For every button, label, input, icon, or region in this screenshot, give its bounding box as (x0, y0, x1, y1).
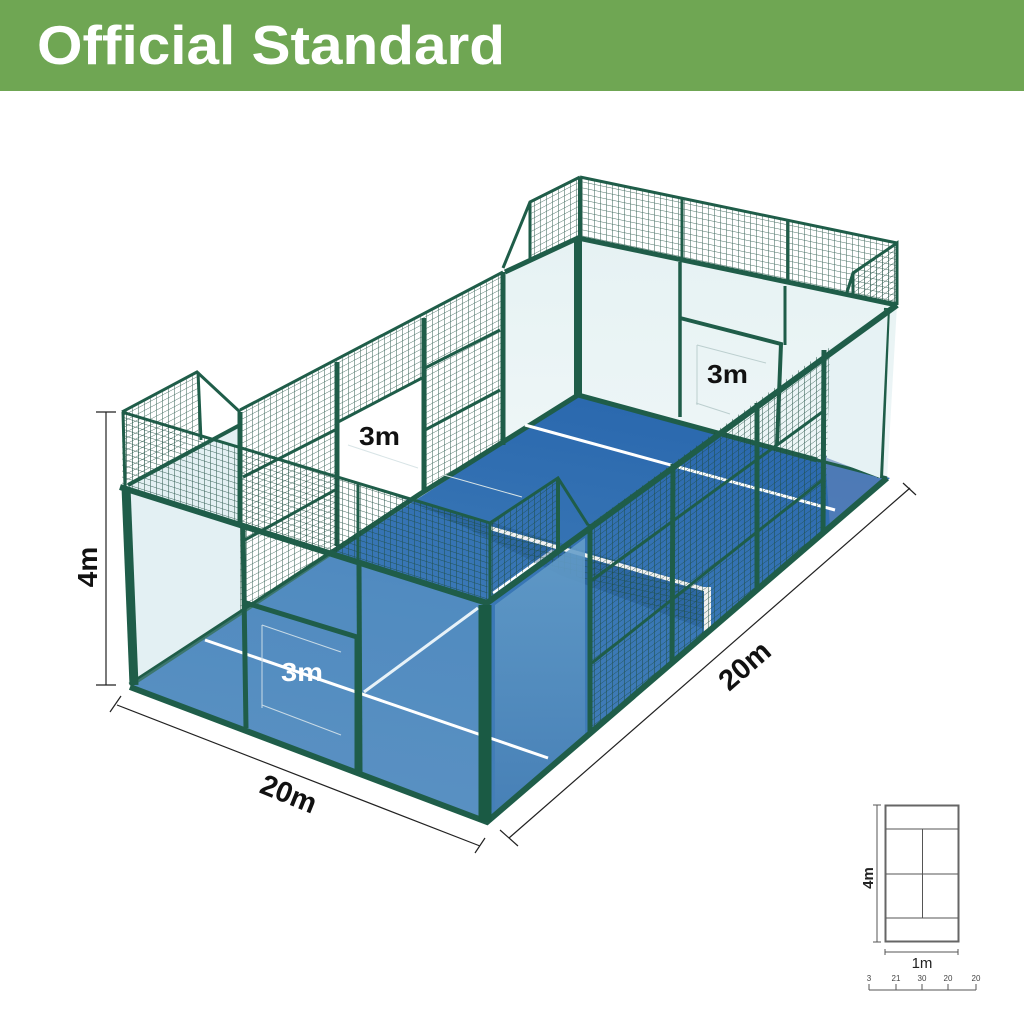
left wall gap (white opening) (338, 378, 422, 545)
right wall: mesh (590, 347, 830, 733)
front glass over floor (130, 555, 487, 822)
back-right corner mesh (830, 243, 897, 347)
scale bar (867, 974, 981, 990)
front wall top mesh (122, 412, 490, 603)
scale bar: 21 (892, 974, 901, 983)
header banner (0, 0, 1024, 91)
court floor (130, 395, 890, 822)
back-left corner mesh (503, 177, 580, 268)
left end top mesh (122, 372, 240, 525)
label: 3m left opening: 3m (359, 421, 400, 451)
label: 3m front door: 3m (281, 657, 323, 687)
front door dimension marks (262, 625, 341, 735)
label: 3m back door: 3m (707, 359, 748, 389)
left wall: mesh (240, 272, 503, 612)
dimension: height 4m: 4m (72, 547, 103, 587)
net (372, 486, 711, 631)
back dimension arrow on floor (348, 445, 522, 497)
back wall frame (130, 238, 897, 685)
right far glass panel (827, 308, 888, 478)
back door dimension marks (696, 345, 766, 414)
floor far-right glass tint (825, 455, 887, 528)
front wall frame (120, 305, 897, 822)
dimension: width 20m: 20m (255, 769, 321, 820)
plan dimension: 1m (885, 949, 958, 972)
plan dimension: 4m: 4m (860, 867, 877, 889)
scale bar: 20 (944, 974, 953, 983)
right wall glass panel (495, 538, 585, 815)
scale bar: 3 (867, 974, 872, 983)
scale bar: 30 (918, 974, 927, 983)
dimension: length 20m (500, 483, 916, 846)
dimension: width 20m (110, 696, 485, 853)
title: Official Standard (37, 14, 505, 76)
dimension: height 4m (72, 412, 116, 685)
mini court plan diagram (860, 805, 981, 990)
front-right top mesh (490, 478, 588, 597)
back wall: glass (505, 238, 897, 480)
plan dimension: 4m (860, 805, 881, 942)
dimension: length 20m: 20m (713, 635, 777, 697)
padel court illustration (120, 177, 897, 822)
left wall glass end panel (125, 426, 240, 685)
back wall: top mesh (578, 177, 897, 305)
plan dimension: 1m: 1m (912, 955, 932, 972)
scale bar: 20 (972, 974, 981, 983)
court lines (364, 425, 835, 692)
service line (205, 640, 548, 758)
